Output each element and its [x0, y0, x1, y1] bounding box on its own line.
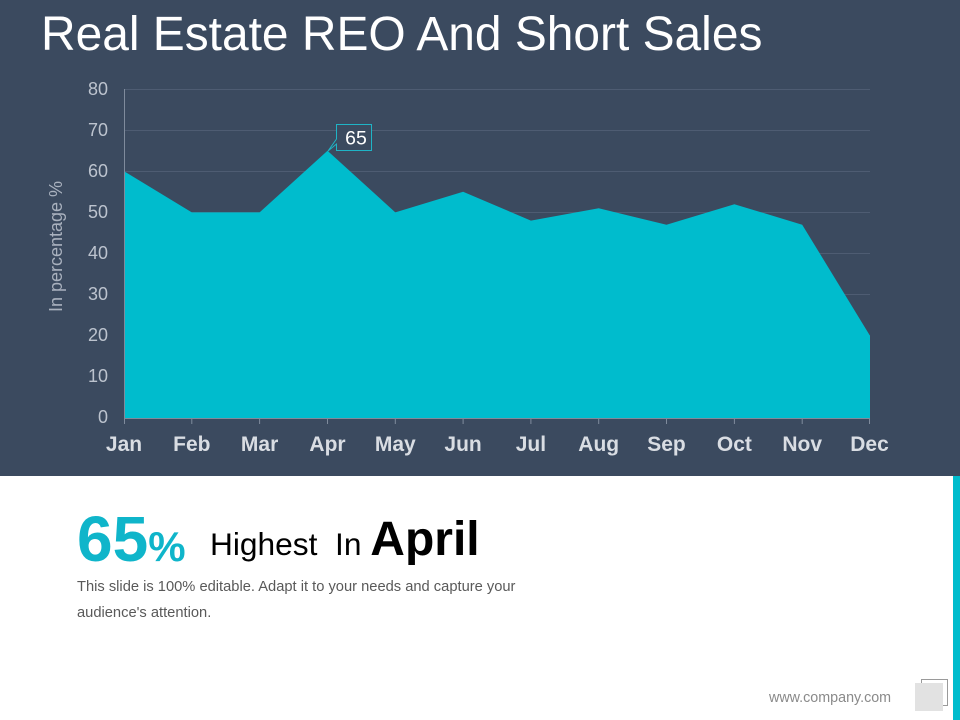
x axis month labels: Dec: [850, 433, 889, 456]
big stat: 65%: 65%: [77, 503, 186, 575]
heading: Highest In April: Highest In April: [210, 513, 480, 566]
x axis month labels: Jan: [106, 433, 142, 456]
axes: [124, 89, 870, 424]
footer url: www.company.com: [769, 690, 891, 706]
x axis month labels: Feb: [173, 433, 210, 456]
x axis month labels: Jun: [444, 433, 482, 456]
area series: [124, 151, 870, 418]
panel: dark chart background: [0, 0, 960, 476]
x axis month labels: Apr: [309, 433, 346, 456]
icon: logo placeholder squares: [915, 679, 948, 711]
description text: This slide is 100% editable. Adapt it to your needs and capture your: [77, 579, 515, 595]
y axis tick labels: 80: [88, 79, 108, 99]
area chart: [46, 79, 889, 456]
y axis tick labels: 20: [88, 325, 108, 345]
data callout: 65: 65: [345, 128, 367, 150]
x axis month labels: Aug: [578, 433, 619, 456]
x axis month labels: Mar: [241, 433, 278, 456]
y axis tick labels: 0: [98, 407, 108, 427]
description text: audience's attention.: [77, 605, 211, 621]
x axis month labels: Jul: [516, 433, 546, 456]
x axis month labels: Nov: [782, 433, 822, 456]
y axis tick labels: 60: [88, 161, 108, 181]
title: Real Estate REO And Short Sales: [41, 8, 762, 61]
y axis title: In percentage %: [46, 181, 66, 312]
x axis month labels: May: [375, 433, 416, 456]
data callout: 65: [328, 124, 372, 151]
y axis tick labels: 40: [88, 243, 108, 263]
x axis month labels: Oct: [717, 433, 752, 456]
y axis tick labels: 10: [88, 366, 108, 386]
y axis tick labels: [88, 79, 108, 427]
y axis tick labels: 70: [88, 120, 108, 140]
y axis tick labels: 30: [88, 284, 108, 304]
accent bar right: [953, 476, 960, 720]
x axis month labels: [106, 433, 889, 456]
y axis tick labels: 50: [88, 202, 108, 222]
description text: [77, 579, 516, 621]
x axis month labels: Sep: [647, 433, 686, 456]
